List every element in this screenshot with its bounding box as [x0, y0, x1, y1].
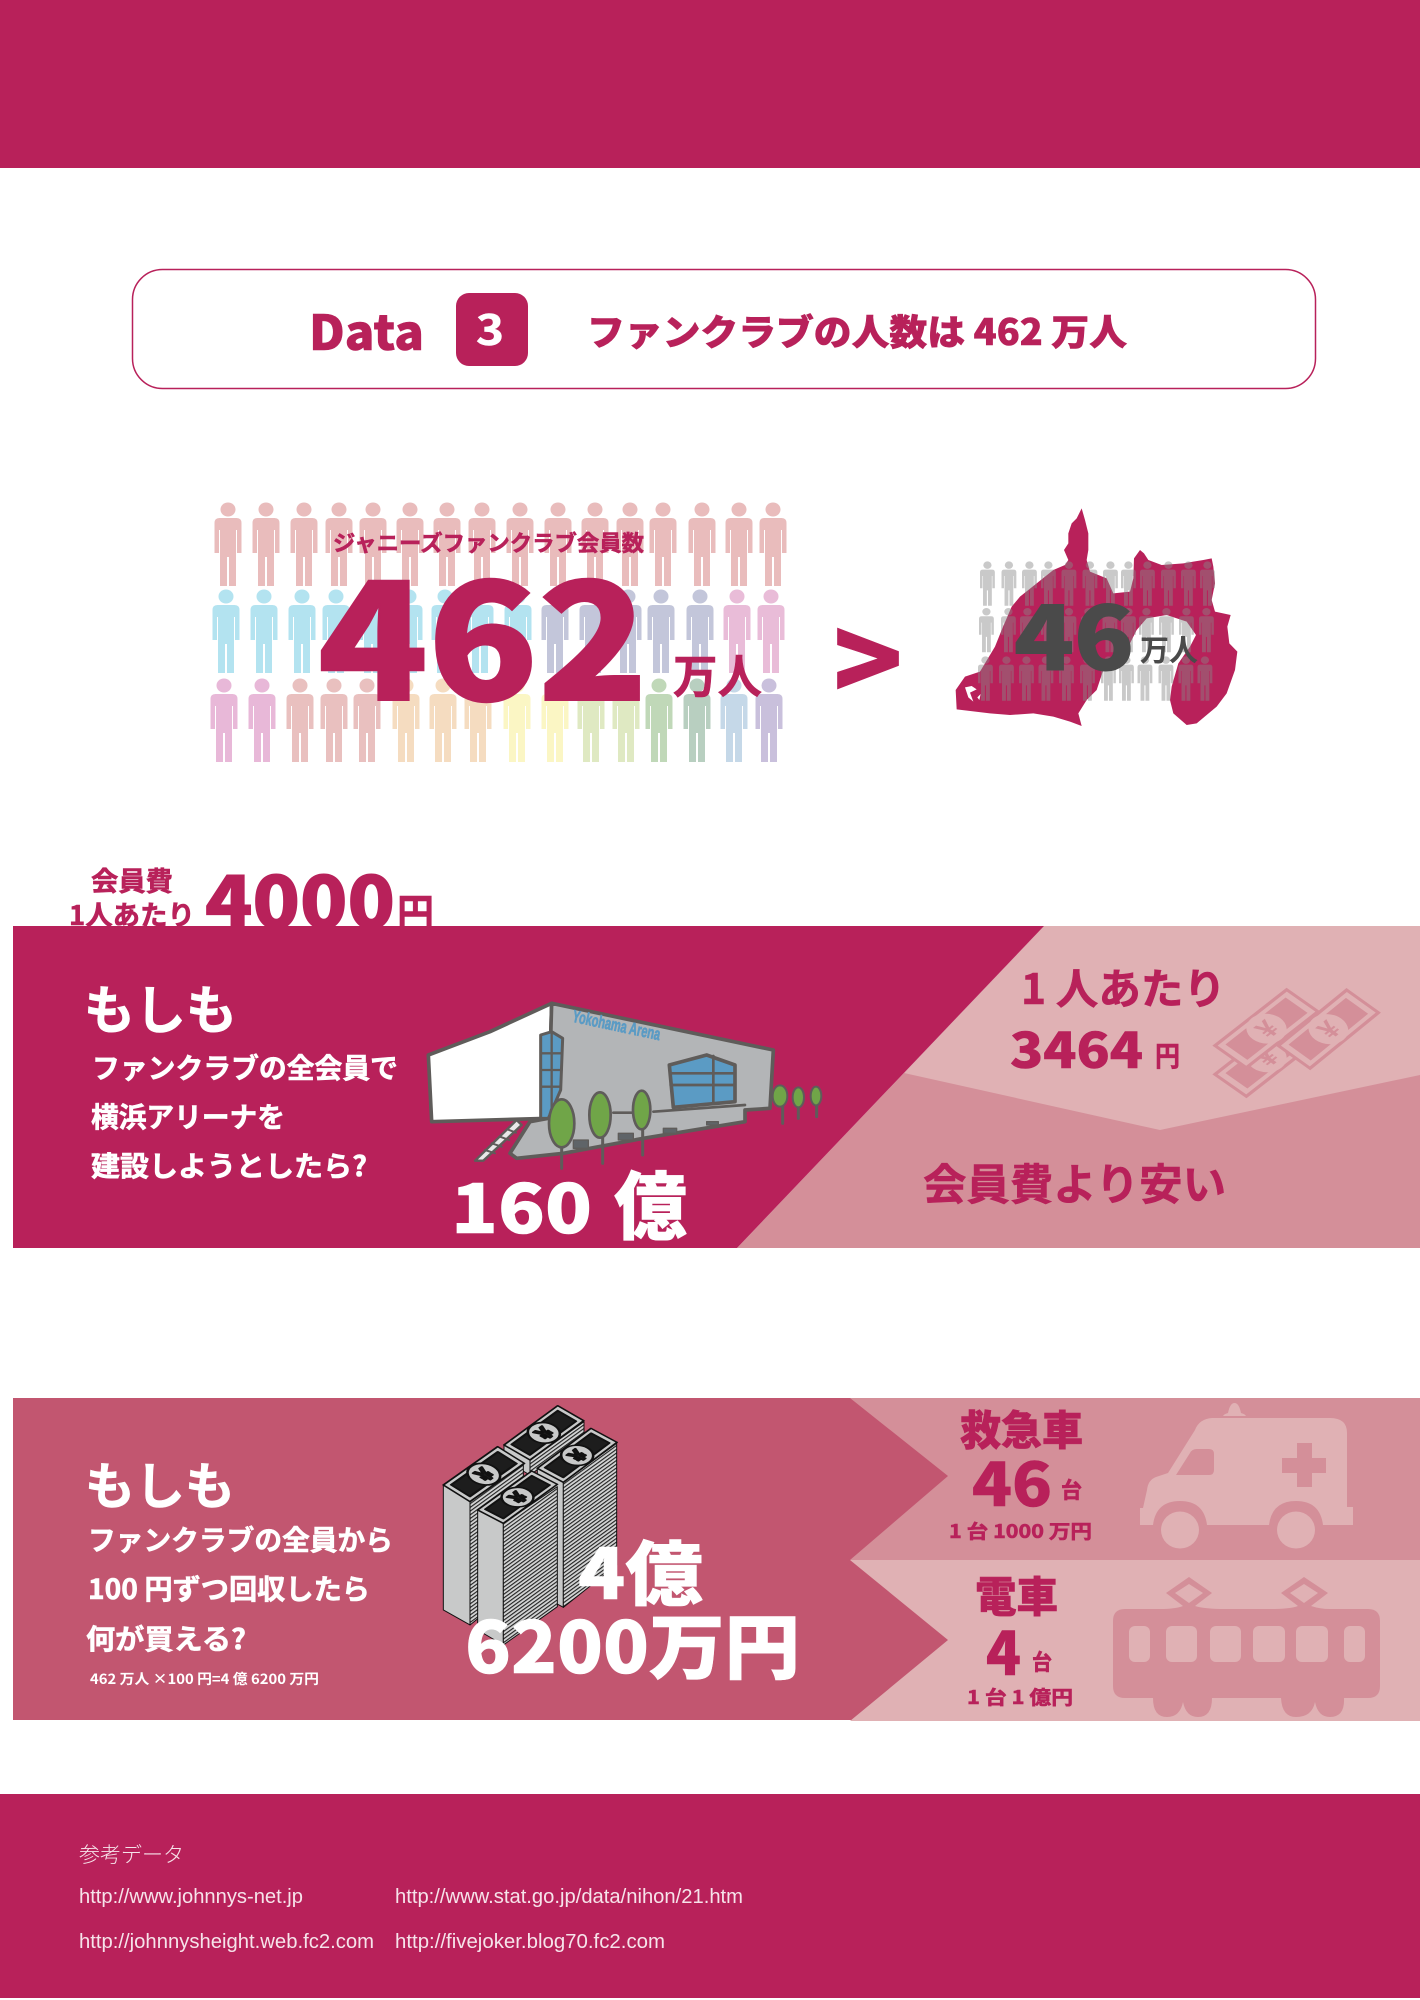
- title text: ファンクラブの人数は 462 万人: [587, 304, 1127, 356]
- scenario text: [86, 1519, 393, 1658]
- pictogram of 462 people: [210, 502, 786, 762]
- ambulance text: 台: [1061, 1473, 1082, 1505]
- scenario text: ファンクラブの全会員で: [92, 1047, 398, 1087]
- left dark area: [13, 926, 1044, 1248]
- number 46: 46: [1014, 569, 1134, 696]
- label: Data: Data: [309, 294, 424, 364]
- amount: 160億: 億: [614, 1148, 687, 1255]
- train text: 4: [986, 1606, 1021, 1693]
- unit 万人: 万人: [1140, 626, 1198, 670]
- train text: 1 台 1 億円: [967, 1683, 1073, 1710]
- ambulance text: 1 台 1000 万円: [949, 1517, 1092, 1544]
- scenario text: 横浜アリーナを: [91, 1096, 285, 1136]
- number badge: [456, 293, 528, 366]
- illustration: Yokohama Arena building: [428, 1003, 821, 1168]
- scenario text: ファンクラブの全員から: [88, 1519, 393, 1559]
- label: fan club members: ジャニーズファンクラブ会員数: [333, 526, 644, 558]
- number badge: 3: [476, 297, 504, 358]
- panel: Yokohama Arena scenario: [13, 926, 1420, 1255]
- greater-than sign: >: [833, 570, 903, 736]
- membership fee label: [69, 847, 434, 949]
- icon: train: [1113, 1577, 1380, 1717]
- scenario text: [91, 1047, 398, 1185]
- heading: もしも: もしも: [84, 969, 237, 1044]
- membership fee label: 1人あたり: [69, 894, 195, 933]
- ambulance row background: [850, 1398, 1420, 1560]
- amount: 160億: 160: [451, 1156, 592, 1253]
- references heading: 参考データ: [79, 1839, 184, 1869]
- per person amount: 1 人あたり: [1021, 956, 1226, 1017]
- amount: 160億: [451, 1148, 687, 1255]
- unit 万人: 万人: [673, 641, 762, 707]
- scenario text: 100 円ずつ回収したら: [88, 1568, 370, 1608]
- ambulance text: 46: [972, 1437, 1052, 1524]
- left base area: [13, 1398, 1013, 1720]
- amount: 4億6200万円: 6200万円: [465, 1592, 800, 1694]
- footer band with references: [0, 1794, 1420, 1998]
- reference links: http://www.stat.go.jp/data/nihon/21.htm: [395, 1886, 743, 1908]
- train row background: [850, 1560, 1420, 1721]
- ambulance text: [949, 1397, 1092, 1544]
- icon: yen banknotes: [1215, 990, 1378, 1096]
- 46万 people pictogram: [978, 561, 1215, 701]
- right upper area: [904, 926, 1420, 1130]
- map of Shizuoka: [956, 508, 1237, 726]
- icon: ambulance: [1140, 1403, 1353, 1548]
- membership fee label: 円: [397, 881, 434, 942]
- top header band: [0, 0, 1420, 168]
- right lower area: [737, 926, 1420, 1248]
- section title box: [132, 270, 1316, 388]
- scenario text: 何が買える?: [86, 1618, 246, 1658]
- scenario text: 建設しようとしたら?: [91, 1145, 367, 1185]
- reference links: http://fivejoker.blog70.fc2.com: [395, 1931, 665, 1953]
- per person amount: 3464: [1010, 1012, 1143, 1083]
- formula: 462 万人 ×100 円=4 億 6200 万円: [90, 1669, 319, 1689]
- train text: 台: [1032, 1645, 1052, 1677]
- amount: 4億6200万円: [465, 1519, 800, 1694]
- Shizuoka map with 46万 people: [956, 508, 1237, 726]
- illustration: Yokohama Arena building: Yokohama Arena: [571, 1006, 663, 1044]
- per person amount: 円: [1155, 1035, 1180, 1075]
- conclusion: cheaper than fee: 会員費より安い: [923, 1151, 1226, 1213]
- reference links: http://johnnysheight.web.fc2.com: [79, 1931, 374, 1953]
- membership fee label: 会員費: [91, 860, 173, 899]
- train text: [967, 1564, 1073, 1710]
- per person amount: [1010, 956, 1226, 1083]
- ambulance text: 救急車: [960, 1397, 1083, 1457]
- heading: もしも: もしも: [85, 1447, 235, 1519]
- train text: 電車: [975, 1564, 1058, 1625]
- big number 462: 462: [318, 515, 648, 747]
- reference links: [79, 1886, 743, 1953]
- membership fee label: 4000: [205, 847, 395, 949]
- amount: 4億6200万円: 4億: [578, 1519, 703, 1620]
- panel: collecting 100 yen scenario: [13, 1397, 1420, 1721]
- icon: stacks of banknotes: [443, 1406, 617, 1645]
- reference links: http://www.johnnys-net.jp: [79, 1886, 303, 1908]
